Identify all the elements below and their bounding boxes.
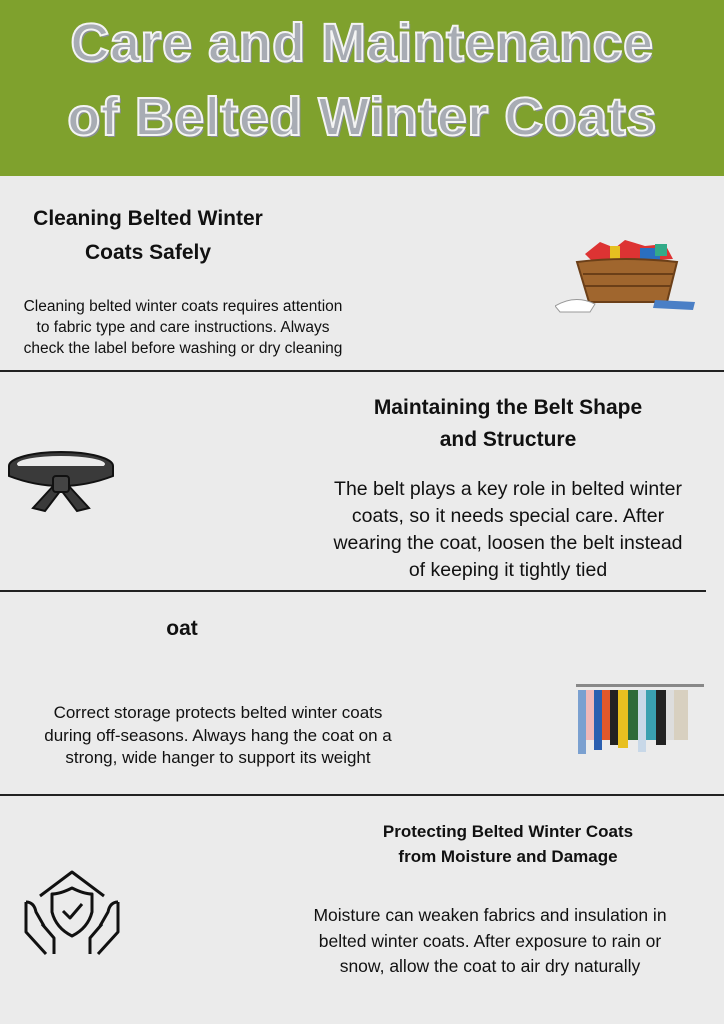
text: storage: Correct storage protects belted winter coats: [54, 703, 382, 722]
title: Care and Maintenance: [70, 13, 654, 73]
text: cleaning: Cleaning belted winter coats requires attention: [24, 298, 342, 315]
text: cleaning: [24, 298, 342, 357]
title: [67, 13, 657, 147]
text: storage: [44, 703, 392, 767]
heading: moisture: from Moisture and Damage: [398, 847, 618, 866]
heading: cleaning: [33, 207, 263, 264]
title: of Belted Winter Coats: [67, 87, 657, 147]
heading: storage: oat: [166, 617, 198, 640]
panel: belt: [8, 396, 683, 581]
text: belt: [333, 478, 683, 581]
heading: cleaning: Coats Safely: [85, 241, 211, 264]
text: cleaning: check the label before washing or dry cleaning: [24, 340, 342, 357]
icon: clothes rack: [576, 684, 704, 754]
text: moisture: [313, 905, 667, 976]
text: moisture: Moisture can weaken fabrics and insulation in: [313, 905, 667, 925]
heading: belt: [374, 396, 642, 451]
text: moisture: snow, allow the coat to air dry naturally: [340, 956, 640, 976]
heading: belt: and Structure: [440, 428, 576, 451]
text: belt: coats, so it needs special care. After: [352, 505, 664, 527]
heading: moisture: Protecting Belted Winter Coats: [383, 822, 633, 841]
heading: moisture: [383, 822, 633, 866]
icon: protected hands: [24, 870, 120, 955]
text: storage: strong, wide hanger to support its weight: [65, 748, 371, 767]
text: belt: The belt plays a key role in belted winter: [334, 478, 682, 500]
panel: moisture: [24, 822, 667, 976]
heading: cleaning: Cleaning Belted Winter: [33, 207, 263, 230]
text: storage: during off-seasons. Always hang the coat on a: [44, 726, 392, 744]
icon: belt: [8, 451, 114, 512]
heading: belt: Maintaining the Belt Shape: [374, 396, 642, 419]
text: belt: wearing the coat, loosen the belt instead: [333, 532, 683, 554]
panel: storage: [44, 617, 704, 767]
icon: laundry basket: [555, 240, 695, 312]
header banner: [0, 0, 724, 176]
text: cleaning: to fabric type and care instructions. Always: [37, 319, 329, 336]
text: belt: of keeping it tightly tied: [409, 559, 607, 581]
text: moisture: belted winter coats. After exposure to rain or: [319, 930, 661, 950]
panel: cleaning: [24, 207, 695, 357]
